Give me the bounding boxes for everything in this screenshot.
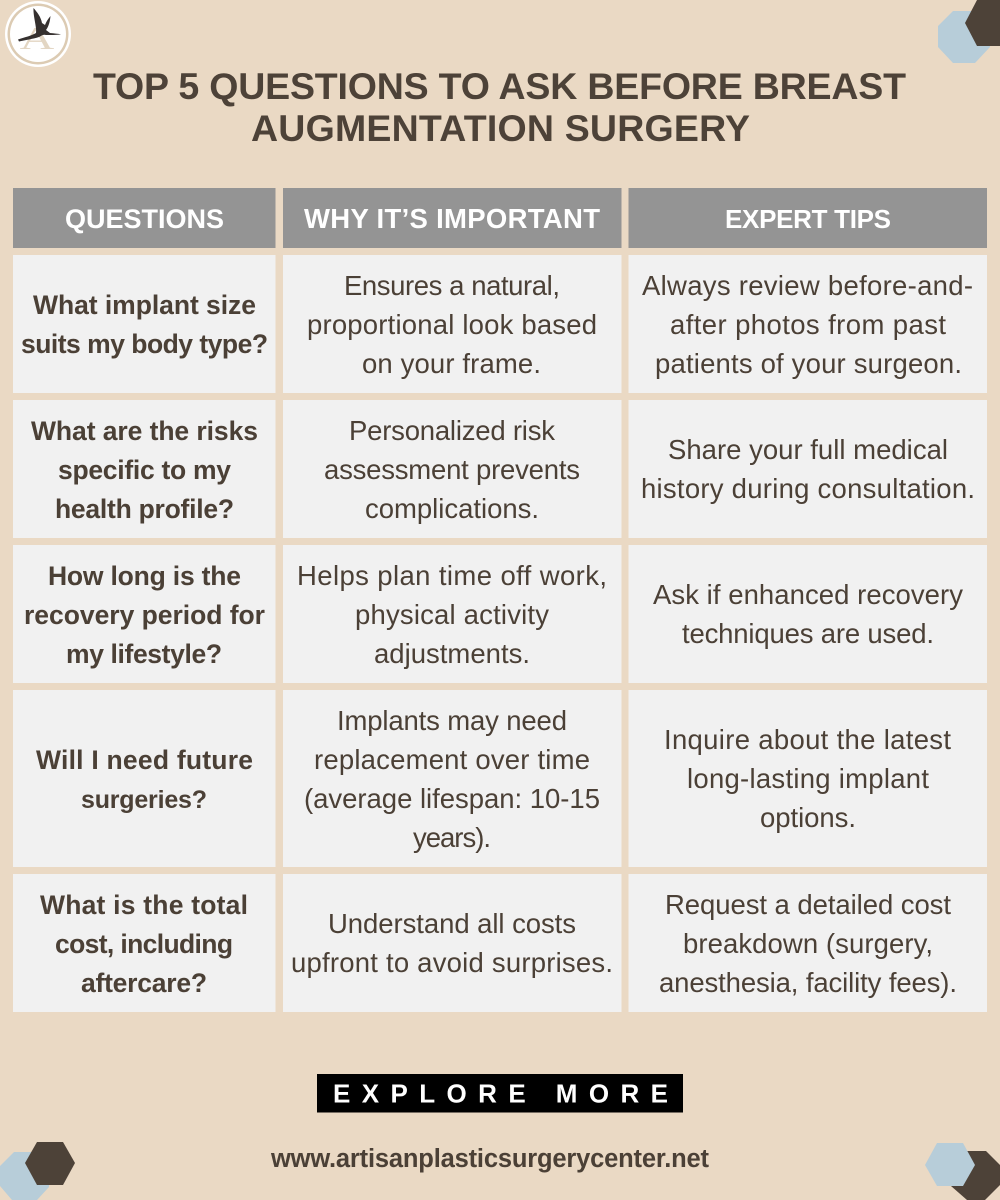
row 5: total cost: What is the total — [40, 890, 248, 920]
row 2: risks: Personalized risk — [349, 415, 555, 446]
decoration: bottom-left blue octagon and dark hexagon — [0, 1142, 75, 1200]
row 2: risks: complications. — [365, 493, 539, 524]
row 3: recovery: techniques are used. — [682, 618, 934, 649]
table header row: QUESTIONS — [65, 204, 224, 234]
call to action: explore more: EXPLORE MORE — [333, 1078, 668, 1108]
row 4: future surgeries: surgeries? — [81, 786, 207, 814]
decoration: bottom-right dark octagon and blue hexagon — [925, 1143, 1000, 1200]
row 1: implant size — [13, 255, 987, 393]
title: TOP 5 QUESTIONS TO ASK BEFORE BREAST — [93, 65, 906, 107]
row 5: total cost: upfront to avoid surprises. — [291, 947, 613, 978]
decoration: top-right blue octagon and dark hexagon — [938, 0, 1000, 63]
row 3: recovery: Ask if enhanced recovery — [653, 579, 963, 610]
row 5: total cost — [13, 874, 987, 1012]
table header row: EXPERT TIPS — [725, 204, 891, 234]
row 4: future surgeries: replacement over time — [314, 744, 590, 775]
row 1: implant size: Ensures a natural, — [344, 270, 560, 301]
row 3: recovery: Helps plan time off work, — [297, 560, 607, 591]
row 5: total cost: anesthesia, facility fees). — [659, 967, 957, 998]
row 2: risks: assessment prevents — [324, 454, 580, 485]
table header row — [13, 188, 987, 248]
row 4: future surgeries: long-lasting implant — [687, 763, 929, 794]
row 1: implant size: proportional look based — [307, 309, 597, 340]
logo: bird and letter A badge: A — [20, 21, 55, 56]
row 1: implant size: What implant size — [33, 290, 256, 320]
row 3: recovery — [13, 545, 987, 683]
row 4: future surgeries: options. — [760, 802, 856, 833]
row 5: total cost: Request a detailed cost — [665, 889, 951, 920]
row 3: recovery: adjustments. — [374, 638, 530, 669]
row 1: implant size: suits my body type? — [21, 329, 268, 359]
row 1: implant size: Always review before-and- — [642, 270, 973, 301]
row 2: risks: history during consultation. — [641, 473, 975, 504]
row 2: risks: specific to my — [58, 455, 231, 485]
row 2: risks: health profile? — [55, 494, 234, 524]
row 2: risks: Share your full medical — [668, 434, 948, 465]
table — [13, 188, 987, 1012]
row 4: future surgeries: Will I need future — [36, 745, 253, 775]
row 3: recovery: my lifestyle? — [66, 639, 222, 669]
title: AUGMENTATION SURGERY — [251, 107, 750, 149]
row 3: recovery: physical activity — [355, 599, 549, 630]
row 1: implant size: on your frame. — [362, 348, 541, 379]
row 4: future surgeries: Inquire about the latest — [664, 724, 951, 755]
row 5: total cost: aftercare? — [81, 968, 207, 998]
row 4: future surgeries — [13, 690, 987, 867]
title — [93, 65, 906, 149]
row 4: future surgeries: (average lifespan: 10-15 — [304, 783, 600, 814]
table header row: WHY IT’S IMPORTANT — [304, 203, 600, 234]
row 3: recovery: How long is the — [48, 561, 241, 591]
row 5: total cost: cost, including — [55, 929, 233, 959]
row 2: risks — [13, 400, 987, 538]
row 5: total cost: breakdown (surgery, — [683, 928, 933, 959]
row 1: implant size: patients of your surgeon. — [655, 348, 962, 379]
logo: bird and letter A badge — [5, 1, 71, 67]
row 3: recovery: recovery period for — [24, 600, 265, 630]
row 5: total cost: Understand all costs — [328, 908, 576, 939]
row 1: implant size: after photos from past — [670, 309, 946, 340]
website url: www.artisanplasticsurgerycenter.net — [270, 1145, 710, 1173]
row 2: risks: What are the risks — [31, 416, 258, 446]
row 4: future surgeries: Implants may need — [337, 705, 567, 736]
row 4: future surgeries: years). — [413, 822, 491, 853]
